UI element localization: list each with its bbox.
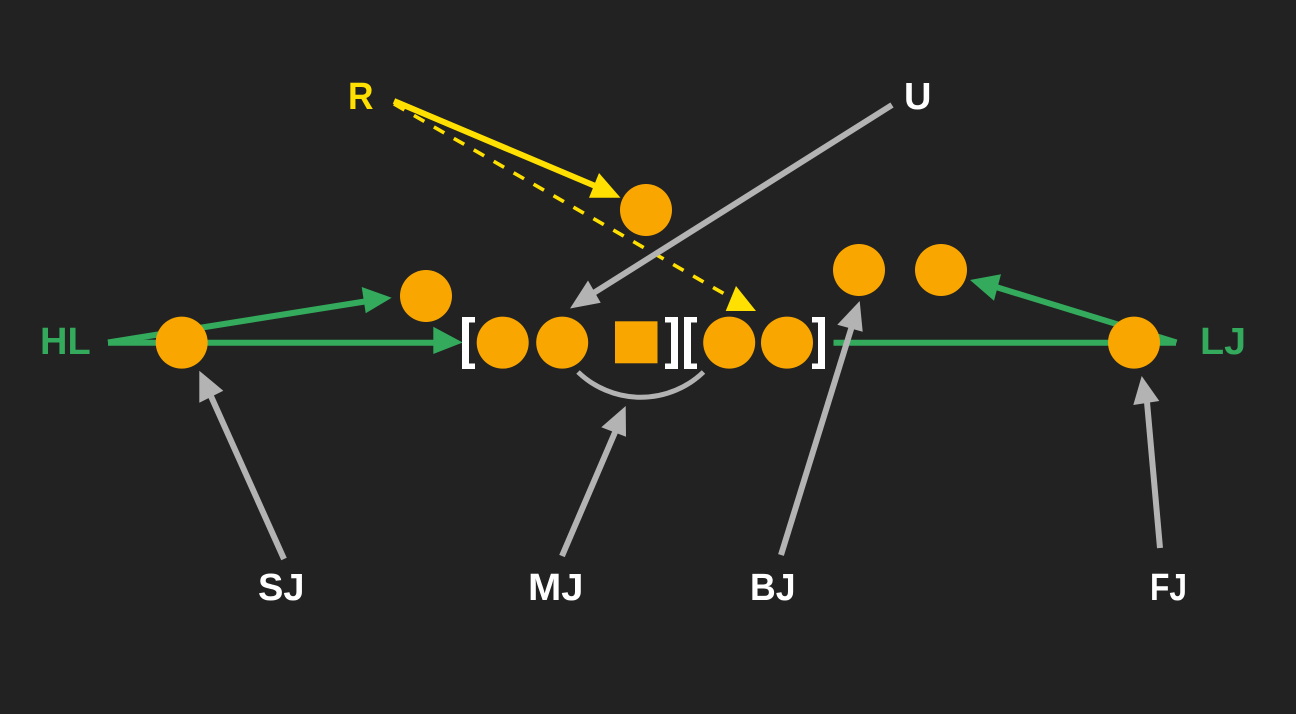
label: LJ: LJ — [1200, 321, 1246, 363]
arrow: MJ — [562, 406, 626, 556]
arrow: LJ diagonal to player — [970, 274, 1176, 342]
arrow: SJ — [199, 371, 284, 559]
line: LJ straight — [834, 340, 1176, 346]
label: HL: HL — [40, 321, 91, 363]
label: R: R — [348, 76, 374, 118]
arrow: R dashed — [394, 104, 756, 311]
label: MJ: MJ — [528, 567, 584, 609]
label: BJ: BJ — [750, 567, 796, 609]
arc: MJ block — [578, 372, 704, 397]
player circles — [156, 184, 1160, 369]
arrow: FJ — [1133, 376, 1160, 548]
label: SJ: SJ — [258, 567, 304, 609]
arrow: R solid — [394, 101, 620, 198]
label: FJ: FJ — [1150, 567, 1187, 609]
arrow: U — [570, 105, 892, 308]
brackets — [462, 317, 825, 369]
arrow: HL straight to line — [108, 327, 463, 354]
arrow: BJ — [781, 301, 863, 555]
arrow: HL diagonal to player — [108, 287, 392, 342]
label: U: U — [904, 76, 931, 118]
